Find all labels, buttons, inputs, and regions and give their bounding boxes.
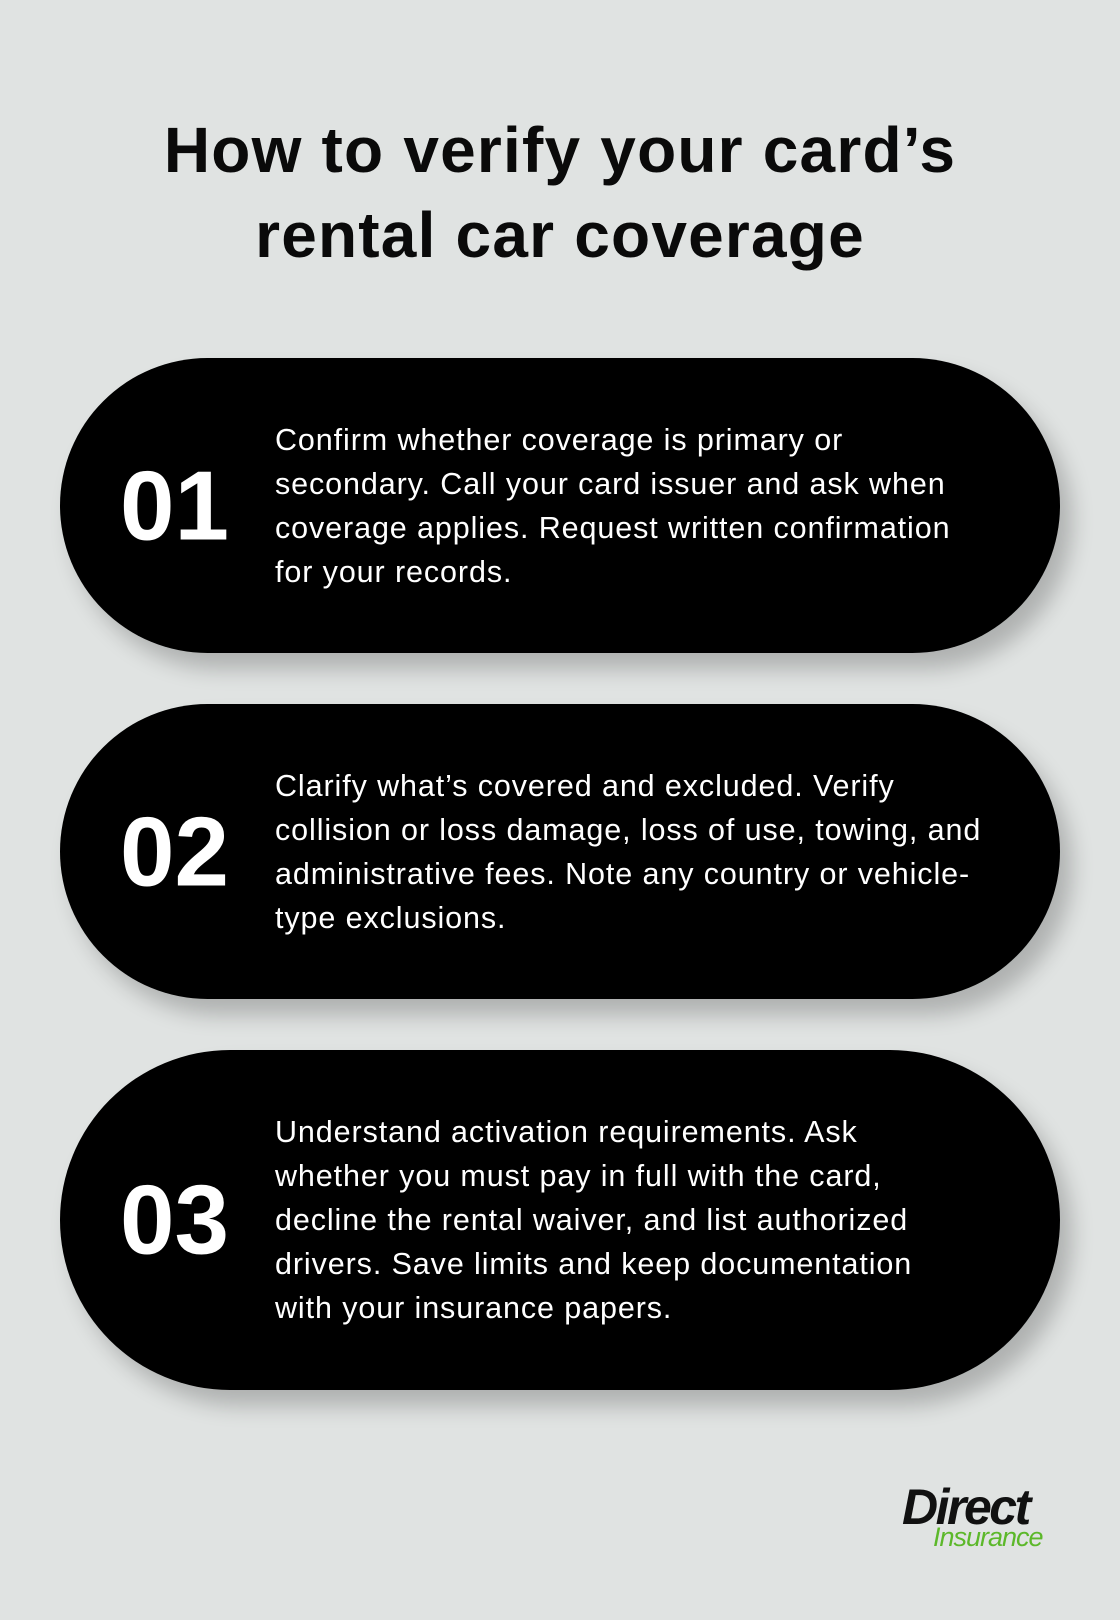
text step 02 bbox=[275, 768, 981, 934]
logo: Insurance bbox=[933, 1522, 1043, 1552]
title: rental car coverage bbox=[255, 199, 865, 271]
text step 02: type exclusions. bbox=[275, 900, 506, 934]
text step 02: Clarify what’s covered and excluded. Verify bbox=[275, 768, 895, 802]
text step 01: for your records. bbox=[275, 554, 512, 588]
text step 01 bbox=[275, 422, 950, 588]
number 03: 03 bbox=[120, 1164, 229, 1274]
panel: step 01 bbox=[60, 358, 1060, 653]
text step 03: whether you must pay in full with the card, bbox=[275, 1159, 882, 1193]
text step 01: secondary. Call your card issuer and ask when bbox=[275, 466, 946, 500]
text step 03: decline the rental waiver, and list authorized bbox=[275, 1203, 908, 1237]
number 02: 02 bbox=[120, 796, 229, 906]
panel: step 03 bbox=[60, 1050, 1060, 1390]
text step 03: drivers. Save limits and keep documentation bbox=[275, 1247, 912, 1281]
text step 03 bbox=[275, 1115, 912, 1325]
title: How to verify your card’s bbox=[164, 114, 956, 186]
logo bbox=[902, 1479, 1043, 1552]
text step 03: with your insurance papers. bbox=[275, 1291, 672, 1325]
text step 02: administrative fees. Note any country or vehicle- bbox=[275, 856, 970, 890]
text step 01: Confirm whether coverage is primary or bbox=[275, 422, 843, 456]
text step 01: coverage applies. Request written confirmation bbox=[275, 510, 950, 544]
number 01: 01 bbox=[120, 450, 229, 560]
title bbox=[164, 114, 956, 271]
panel: step 02 bbox=[60, 704, 1060, 999]
logo: Direct bbox=[902, 1479, 1029, 1535]
text step 02: collision or loss damage, loss of use, towing, and bbox=[275, 812, 981, 846]
text step 03: Understand activation requirements. Ask bbox=[275, 1115, 858, 1149]
